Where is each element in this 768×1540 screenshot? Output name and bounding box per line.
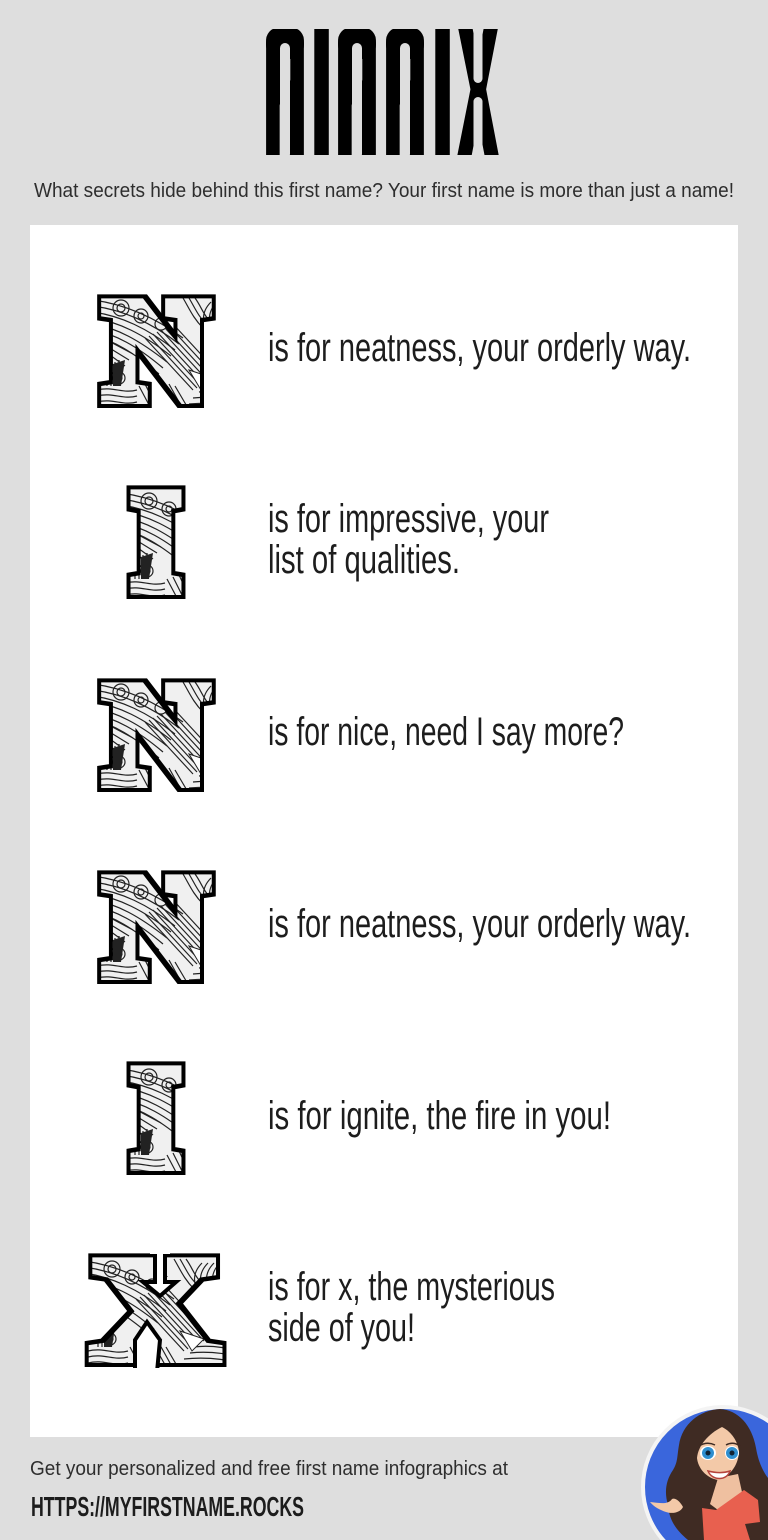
avatar <box>643 1407 768 1540</box>
text: X for mysterious <box>268 1265 555 1350</box>
eyes <box>699 1443 740 1460</box>
title: N <box>266 6 304 178</box>
face <box>697 1427 739 1480</box>
shirt <box>702 1490 760 1540</box>
text: X <box>463 6 494 178</box>
footer text: Get your personalized and free first name infographics at <box>30 1458 508 1480</box>
text: N for nice: is for nice, need I say more? <box>268 710 624 754</box>
neck <box>710 1474 742 1510</box>
icon: doodle letter N: N <box>106 849 207 1004</box>
title: N <box>386 6 424 178</box>
icon: doodle letter N: N <box>106 273 207 428</box>
text: I for impressive: list of qualities. <box>268 538 460 582</box>
title <box>264 6 494 178</box>
panel: letter meanings <box>30 225 738 1437</box>
icon: doodle letter I: I <box>132 1040 180 1195</box>
text: X for mysterious: is for x, the mysterious <box>268 1265 555 1309</box>
title: I <box>314 6 329 178</box>
title: I <box>435 6 450 178</box>
hand <box>650 1499 683 1513</box>
hair <box>666 1409 768 1540</box>
icon: doodle letter N: N <box>106 657 207 812</box>
title: N <box>338 6 376 178</box>
footer url: HTTPS://MYFIRSTNAME.ROCKS <box>31 1491 304 1522</box>
text: X for mysterious: side of you! <box>268 1306 415 1350</box>
text: I for impressive <box>268 497 549 582</box>
avatar circle <box>643 1407 768 1540</box>
subtitle: What secrets hide behind this first name? Your first name is more than just a name! <box>34 180 734 202</box>
mouth <box>708 1471 730 1478</box>
text: I for ignite: is for ignite, the fire in you! <box>268 1094 611 1138</box>
text: I for impressive: is for impressive, your <box>268 497 549 541</box>
icon: doodle letter I: I <box>132 464 180 619</box>
icon: doodle letter X: X <box>94 1232 216 1387</box>
